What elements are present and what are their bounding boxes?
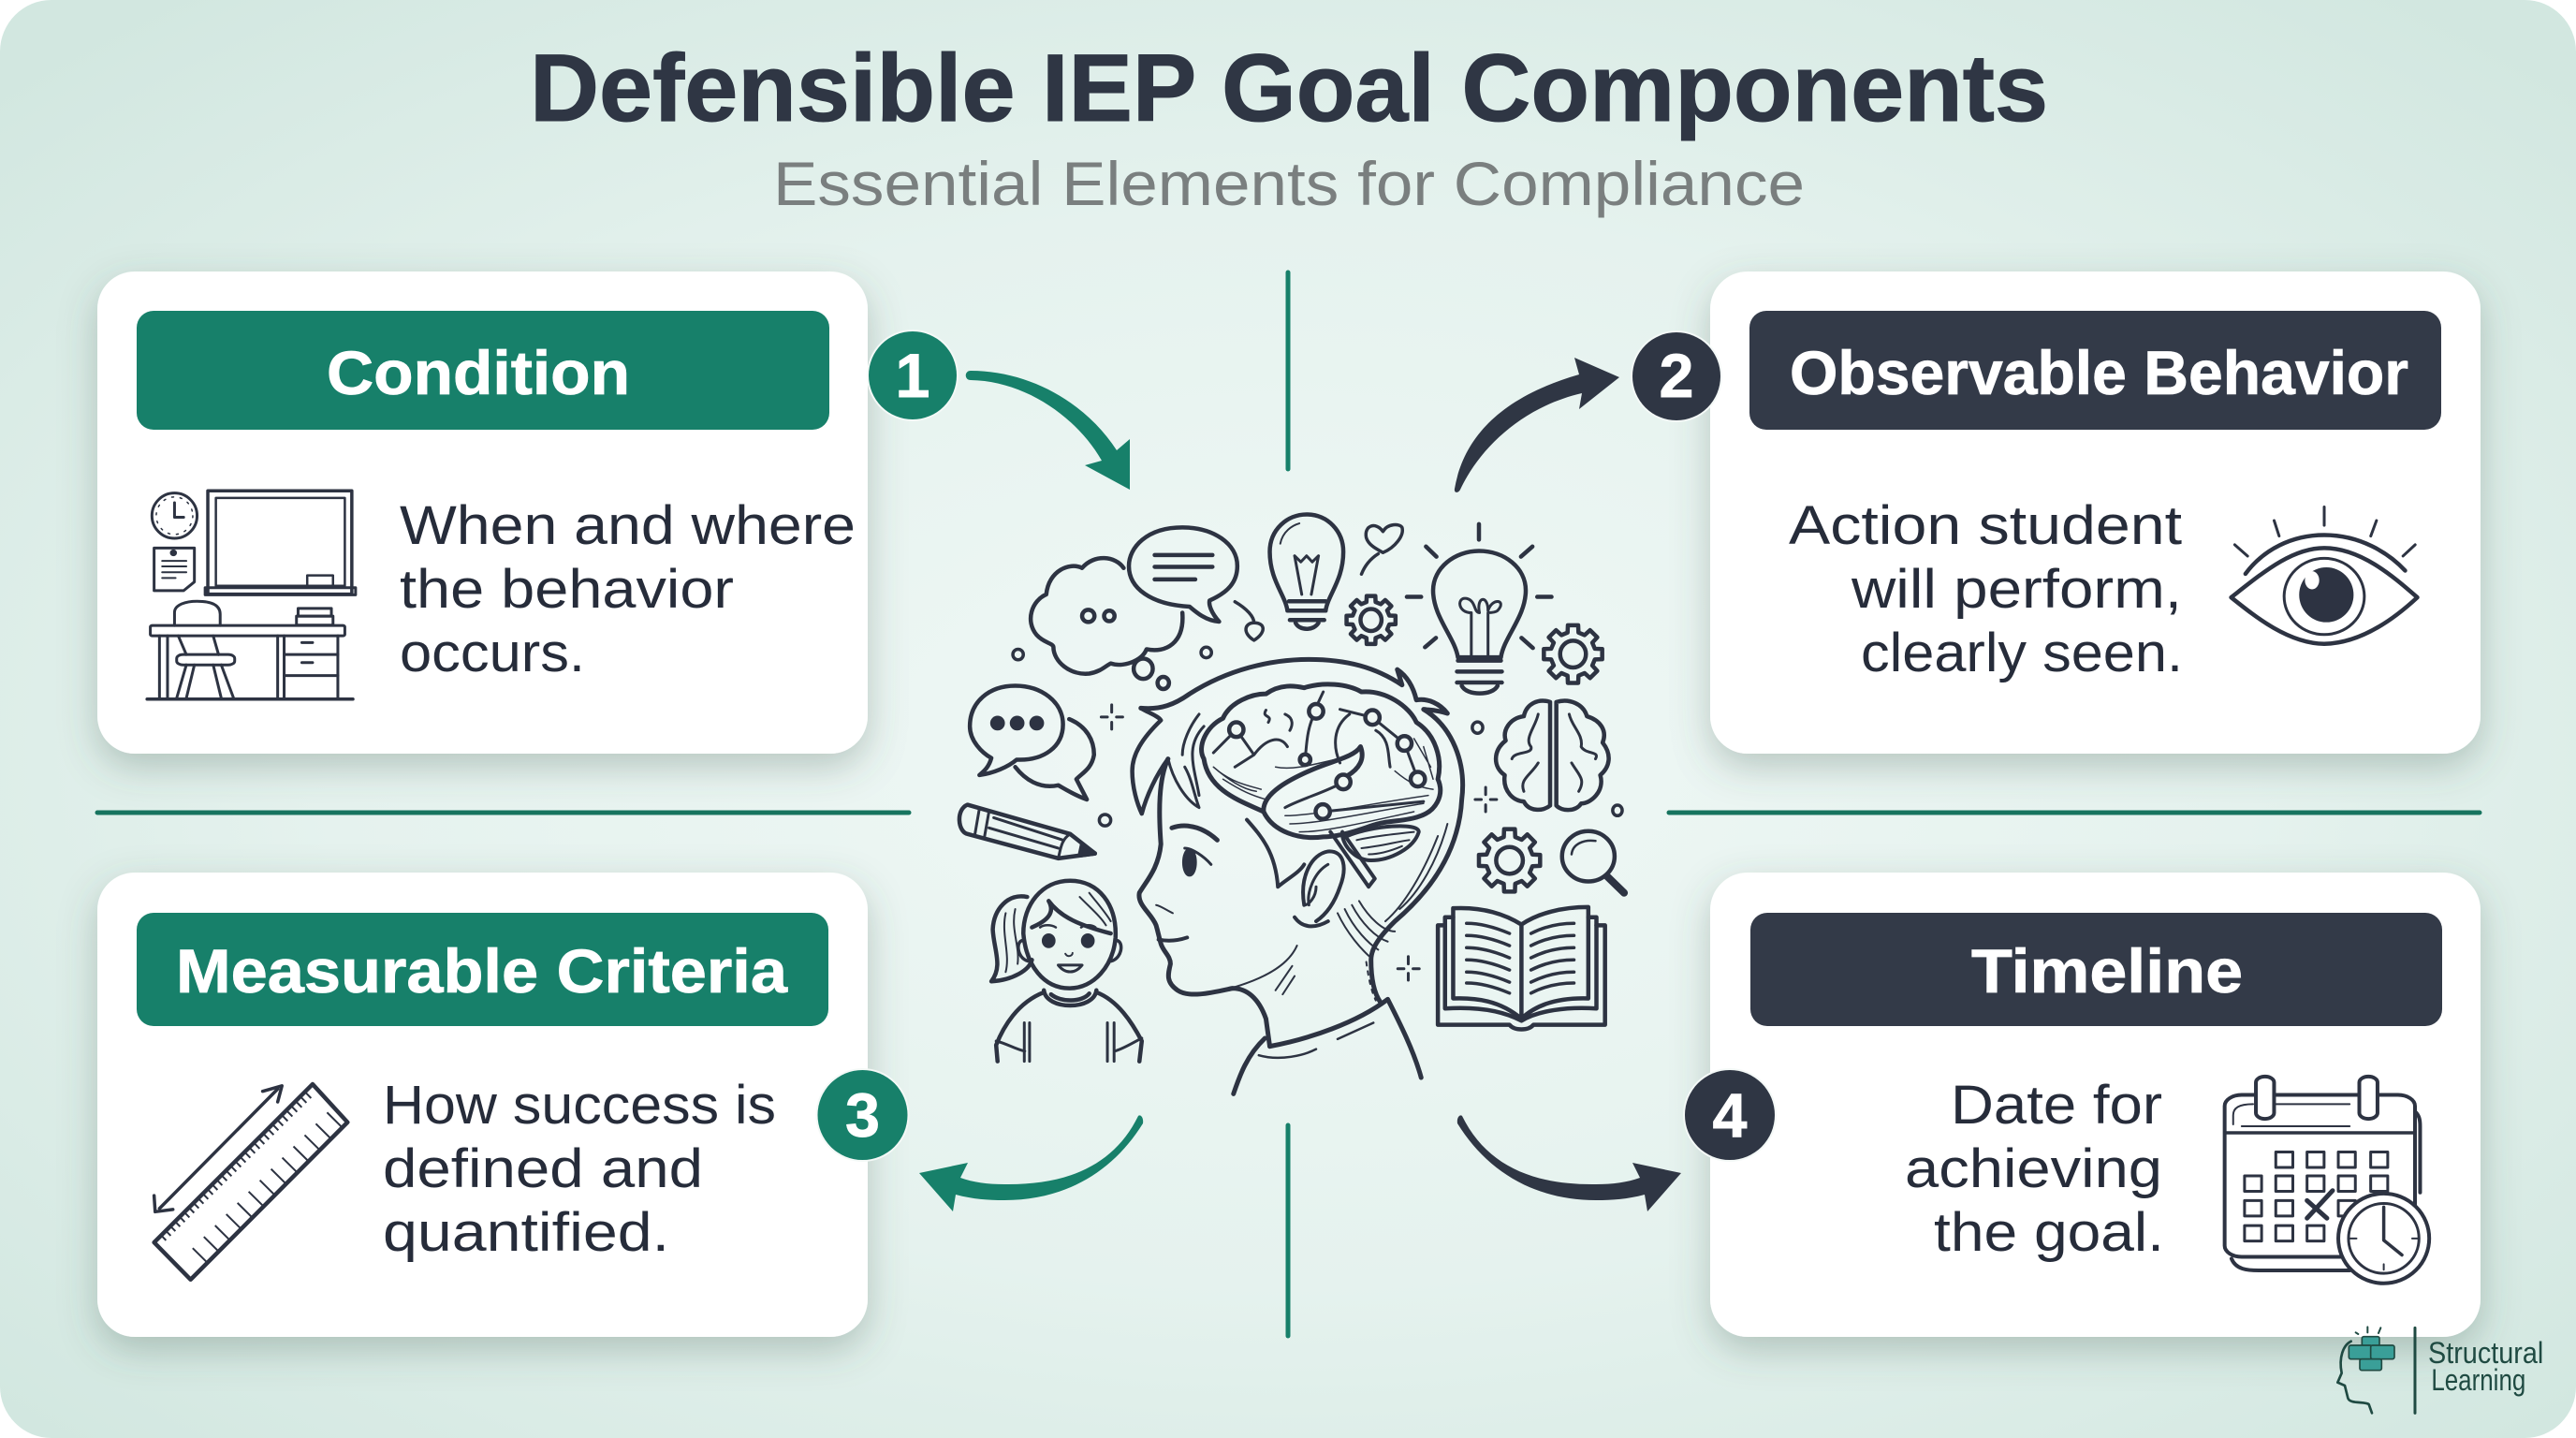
badge 1 [867,330,959,421]
header bar [137,913,828,1026]
arrow 2 [1455,358,1619,492]
arrow 4 [1457,1115,1681,1211]
logo: Structural Learning [2337,1327,2543,1413]
header text: Timeline [1971,936,2243,1005]
header text: Condition [327,338,630,407]
illustration: brain with circuit nodes [1202,684,1441,887]
panel: observable behavior [1710,271,2481,754]
icon: speech bubble with lines [1129,527,1237,622]
badge 4: 4 [1713,1080,1748,1150]
icon: light bulb small [1270,514,1343,629]
card background [1710,271,2481,754]
icon: pencil [959,805,1095,858]
badge 2 [1631,330,1722,422]
arrow 3 [919,1115,1143,1211]
icon: gear right [1544,625,1603,682]
logo head outline [2337,1342,2372,1413]
body text [1789,495,2183,683]
logo wordmark: Learning [2431,1362,2525,1397]
icon: thought cloud [1031,558,1182,689]
body text: occurs. [400,623,585,683]
badge 2: 2 [1660,341,1693,410]
body text [400,495,856,683]
icon: open book [1438,907,1605,1030]
icon: chat bubbles [970,686,1094,800]
icon: gear small [1347,596,1396,644]
icon: heart on string [1361,525,1402,574]
body text [1905,1075,2164,1263]
title: Defensible IEP Goal Components [530,35,2048,141]
icon: magnifying glass [1562,831,1624,893]
card background [1710,873,2481,1337]
card background [97,873,868,1337]
panel: measurable criteria [97,873,868,1337]
illustration: boy head profile [1133,659,1463,1093]
body text: quantified. [383,1202,669,1263]
header bar [1750,913,2442,1026]
body text: When and where [400,495,856,556]
arrow 1 [966,371,1130,490]
decorative sparkles and dots [1013,647,1622,980]
panel: condition [97,271,868,754]
badge 3 [816,1068,910,1162]
central illustration [959,514,1624,1093]
divider: left horizontal [97,811,909,814]
logo divider [2410,1328,2419,1413]
divider: bottom vertical [1286,1125,1290,1336]
badge 1: 1 [896,341,929,410]
icon: eye [2232,507,2417,644]
body text: Date for [1951,1075,2162,1136]
icon: ruler [154,1084,347,1280]
body text: the behavior [400,559,734,620]
body text: defined and [383,1138,703,1199]
header bar [137,311,829,430]
panel: timeline [1710,873,2481,1337]
divider: top vertical [1286,272,1290,469]
logo wordmark: Structural [2428,1335,2543,1370]
icon: small curved heart [1235,602,1263,640]
icon: calendar with clock [2225,1077,2429,1284]
body text: Action student [1789,495,2182,556]
logo puzzle cross [2349,1337,2394,1371]
body text: How success is [383,1075,776,1136]
logo wordmark [2428,1335,2543,1397]
icon: classroom desk [147,491,356,699]
header text: Measurable Criteria [176,936,788,1005]
divider: right horizontal [1669,811,2480,814]
body text [383,1075,776,1263]
icon: two-lobe brain [1496,701,1609,810]
badge 4 [1683,1068,1777,1162]
header text: Observable Behavior [1790,338,2408,407]
icon: gear lower [1479,829,1540,891]
body text: clearly seen. [1861,623,2183,683]
body text: the goal. [1934,1202,2164,1263]
icon: light bulb large [1407,524,1552,694]
body text: will perform, [1851,559,2182,620]
illustration: girl [991,881,1142,1062]
logo rays [2356,1327,2380,1334]
subtitle: Essential Elements for Compliance [773,149,1805,218]
body text: achieving [1905,1138,2162,1199]
header bar [1749,311,2441,430]
badge 3: 3 [845,1080,880,1150]
card background [97,271,868,754]
